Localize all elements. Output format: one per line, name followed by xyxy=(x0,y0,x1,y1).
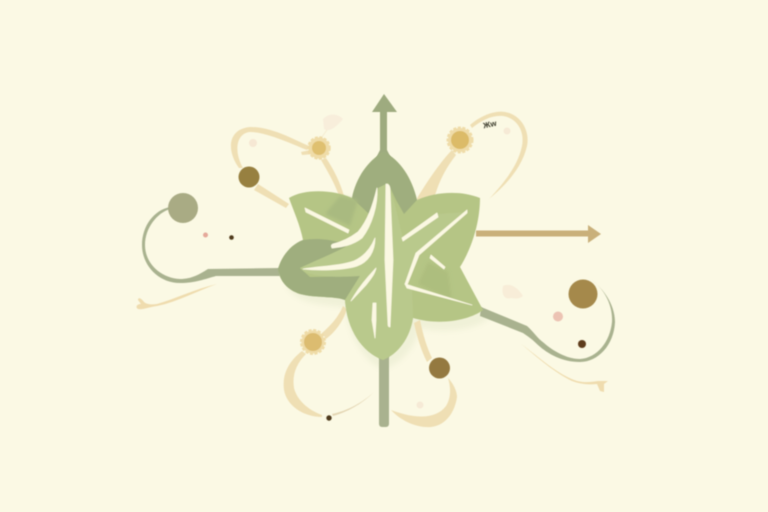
tendril: cream xyxy=(520,343,608,392)
leaf: inner shade xyxy=(418,262,452,300)
leaf: silhouette xyxy=(278,152,483,360)
branch: left sage tendril with circle xyxy=(137,193,280,309)
faint bud xyxy=(323,114,343,130)
branch: upper right loop with node xyxy=(416,112,528,203)
circle: brown xyxy=(568,280,598,308)
node: brown xyxy=(429,358,450,378)
leaf: upper left shade xyxy=(325,196,358,226)
leaf: central star highlight xyxy=(300,183,466,360)
faint dot xyxy=(249,139,257,147)
branch: lower left loop with node xyxy=(284,306,374,421)
leaf: top dark lobe xyxy=(352,152,417,214)
node: lower left gold xyxy=(302,330,324,354)
arrow: right tan xyxy=(476,225,601,243)
faint bud xyxy=(502,285,523,298)
leaf soft shadow xyxy=(285,280,490,369)
faint dot xyxy=(416,402,424,408)
faint dot xyxy=(504,128,510,134)
branch: right sage tendril with circle xyxy=(480,279,615,392)
dot: pink xyxy=(203,232,208,238)
dot: dark xyxy=(578,340,586,348)
node: upper right gold xyxy=(448,128,472,152)
stem: bottom xyxy=(379,350,389,427)
leaf: left dark lobe xyxy=(278,239,360,300)
dot: pink xyxy=(553,312,563,322)
tendril: cream xyxy=(137,284,217,309)
leaf: veins xyxy=(303,184,472,338)
branch: lower right loop with node xyxy=(391,320,457,427)
node: upper left gold xyxy=(308,138,330,158)
node: brown xyxy=(238,166,260,188)
circle: sage xyxy=(168,193,198,223)
small mark: Жw xyxy=(481,119,498,131)
leaf xyxy=(278,152,483,360)
dot: dark xyxy=(229,235,234,240)
dot: dark xyxy=(326,415,332,421)
branch: upper left tendril with node xyxy=(231,114,344,208)
arrow: upward stem xyxy=(372,94,397,160)
